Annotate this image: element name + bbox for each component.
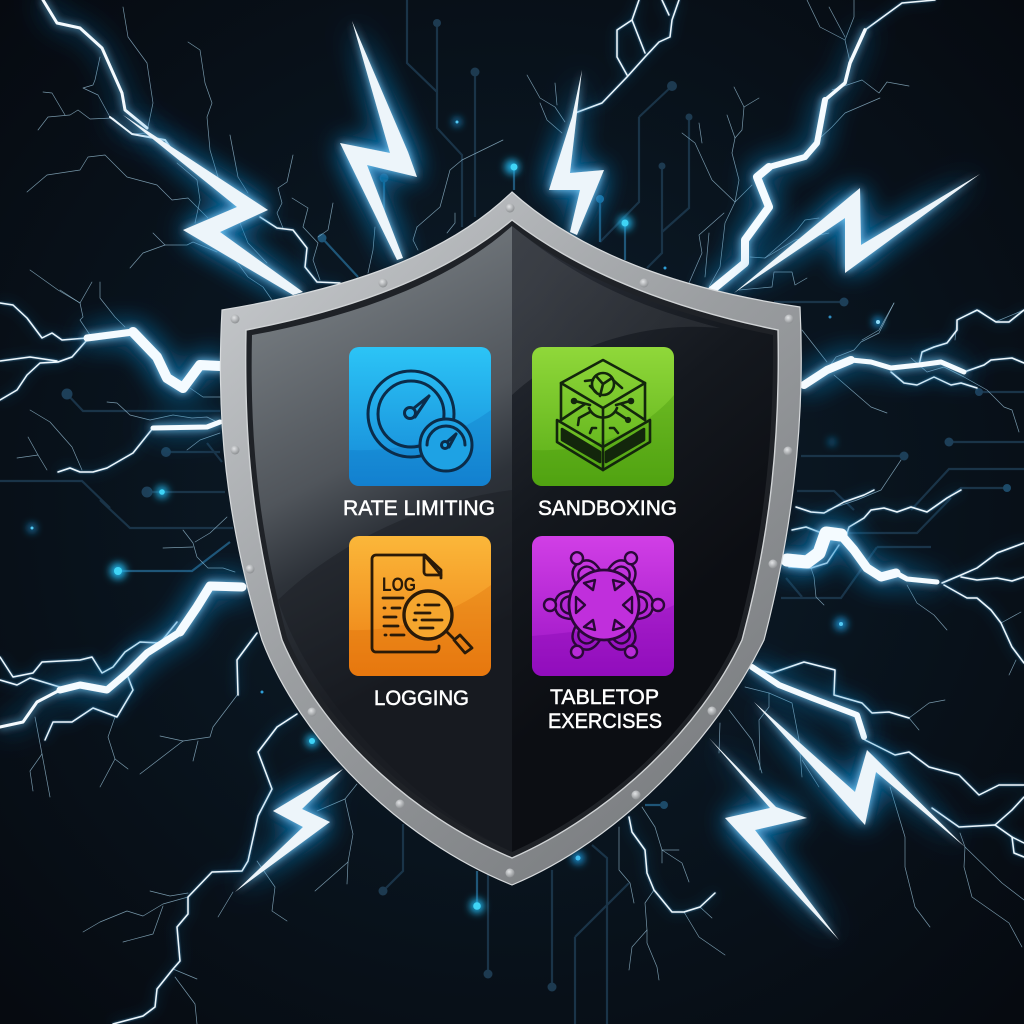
shield left face <box>252 226 512 852</box>
solid zigzag lightning bolts <box>123 21 980 940</box>
tile: blue <box>349 347 491 486</box>
shield right face <box>512 226 773 852</box>
icon: round table with six people <box>544 546 664 664</box>
panel: rate limiting <box>343 347 495 520</box>
tile: purple <box>532 536 674 676</box>
label: logging: LOGGING <box>374 687 469 710</box>
icon: speed gauges <box>368 371 472 471</box>
shield inner dark band <box>246 220 778 858</box>
bolt: top center right <box>549 70 604 235</box>
shield metal rim <box>220 192 801 885</box>
bolt: bottom left <box>235 769 343 892</box>
icon: log file with magnifier <box>372 555 472 653</box>
icon: sandbox cube with bug <box>557 360 650 470</box>
tile gloss <box>349 410 491 486</box>
panel: sandboxing <box>532 347 677 520</box>
glowing circuit nodes <box>28 118 883 913</box>
icon text: LOG: LOG <box>382 575 416 596</box>
label: sandboxing: SANDBOXING <box>538 497 677 520</box>
panel: tabletop exercises <box>532 536 674 733</box>
tile: orange <box>349 536 491 676</box>
label: exercises: EXERCISES <box>548 710 662 733</box>
tile gloss <box>532 605 674 676</box>
label: tabletop: TABLETOP <box>550 686 659 709</box>
thick lightning arcs <box>0 0 964 737</box>
bolt: bottom right <box>709 738 839 940</box>
panel: logging <box>349 536 491 710</box>
tile gloss <box>349 585 491 676</box>
bolt: top right <box>734 174 980 293</box>
tile gloss <box>532 395 674 486</box>
bolt: top left long <box>123 115 303 295</box>
shield <box>220 192 801 885</box>
shield right gloss <box>512 226 720 395</box>
bolt: top center left <box>340 21 417 260</box>
bolt: lower right <box>754 702 965 847</box>
shield left shadow swoosh <box>278 490 512 852</box>
tile: green <box>532 347 674 486</box>
label: rate limiting: RATE LIMITING <box>343 497 495 520</box>
rivets <box>230 204 794 878</box>
